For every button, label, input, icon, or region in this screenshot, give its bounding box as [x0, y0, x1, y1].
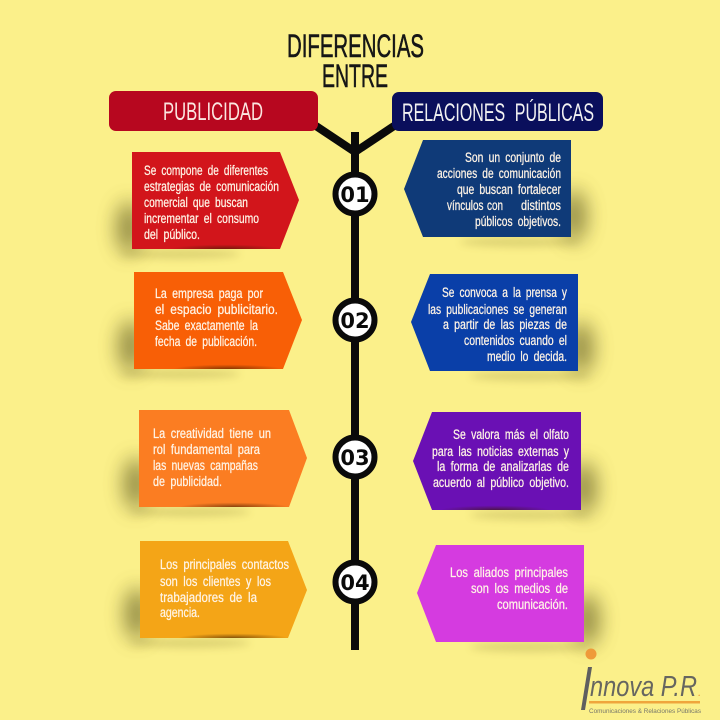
panel: publicidad 3: La creatividad tiene un: [153, 426, 271, 441]
panel: publicidad 1: del público.: [144, 227, 200, 242]
panel: relaciones públicas 4: Los aliados principales: [450, 565, 568, 580]
number badge 04: [336, 562, 374, 602]
number badge 01: 01: [340, 183, 370, 207]
panel: publicidad 2: el espacio publicitario.: [155, 302, 278, 317]
panel: relaciones públicas 3: [413, 412, 581, 510]
panel: publicidad 1: Se compone de diferentes: [144, 163, 268, 178]
panel: publicidad 3: rol fundamental para: [153, 442, 260, 457]
panel: relaciones públicas 1: [404, 140, 571, 237]
timeline connector: [316, 126, 394, 650]
logo: innova p.r.: .: [698, 685, 701, 699]
panel: relaciones públicas 2: contenidos cuando el: [464, 333, 567, 348]
title: DIFERENCIAS: [287, 28, 424, 64]
number badge 04: 04: [340, 571, 370, 595]
logo: innova p.r.: Comunicaciones & Relaciones Públicas: [589, 708, 702, 715]
panel: publicidad 4: trabajadores de la: [160, 590, 257, 605]
heading: publicidad: [109, 91, 318, 131]
panel: publicidad 1: [132, 152, 299, 249]
panel: relaciones públicas 2: Se convoca a la prensa y: [442, 285, 567, 300]
number badge 01: [336, 174, 374, 214]
title: [287, 28, 424, 94]
logo: innova p.r.: [581, 648, 702, 715]
panel: publicidad 3: [139, 410, 307, 507]
number badge 02: [336, 300, 374, 340]
panel: relaciones públicas 2: las publicaciones se generan: [428, 302, 567, 317]
panel: publicidad 1: incrementar el consumo: [144, 211, 259, 226]
heading: relaciones públicas: [392, 92, 603, 131]
panel: relaciones públicas 1: Son un conjunto de: [465, 150, 561, 165]
panel: relaciones públicas 4: [417, 545, 584, 642]
panel: publicidad 2: Sabe exactamente la: [155, 318, 258, 333]
panel: publicidad 4: agencia.: [160, 605, 200, 620]
title: ENTRE: [322, 58, 388, 94]
panel: relaciones públicas 2: medio lo decida.: [487, 349, 567, 364]
panel: relaciones públicas 1: que buscan fortalecer: [457, 182, 561, 197]
panel: relaciones públicas 2: a partir de las piezas de: [443, 317, 567, 332]
number badge 02: 02: [340, 309, 370, 333]
panel: publicidad 3: de publicidad.: [153, 474, 222, 489]
panel: relaciones públicas 1: acciones de comunicación: [437, 166, 561, 181]
panel: publicidad 4: [140, 541, 307, 638]
panel: relaciones públicas 3: para las noticias externas y: [432, 444, 569, 459]
panel: publicidad 1: estrategias de comunicación: [144, 179, 279, 194]
panel: publicidad 2: fecha de publicación.: [155, 334, 257, 349]
panel: relaciones públicas 3: acuerdo al público objetivo.: [433, 475, 569, 490]
panel: publicidad 4: Los principales contactos: [160, 557, 289, 572]
panel: relaciones públicas 1: públicos objetivos.: [475, 214, 561, 229]
panel: relaciones públicas 4: comunicación.: [497, 597, 568, 612]
logo: innova p.r.: nnova P.R: [590, 671, 697, 703]
heading: relaciones públicas: RELACIONES PÚBLICAS: [402, 98, 594, 127]
panel: relaciones públicas 3: la forma de analizarlas de: [437, 459, 569, 474]
panel: publicidad 4: son los clientes y los: [160, 574, 271, 589]
panel: publicidad 2: [134, 272, 302, 369]
panel: publicidad 1: comercial que buscan: [144, 195, 248, 210]
panel: relaciones públicas 1: vínculos con: [447, 198, 503, 213]
panel: relaciones públicas 4: son los medios de: [471, 581, 568, 596]
panel: publicidad 2: La empresa paga por: [155, 286, 263, 301]
number badge 03: [336, 438, 374, 476]
panel: relaciones públicas 3: Se valora más el olfato: [453, 427, 569, 442]
panel: publicidad 3: las nuevas campañas: [153, 458, 258, 473]
number badge 03: 03: [340, 446, 370, 470]
panel: relaciones públicas 2: [411, 274, 578, 371]
heading: publicidad: PUBLICIDAD: [163, 98, 263, 126]
panel: relaciones públicas 1: distintos: [521, 198, 561, 213]
